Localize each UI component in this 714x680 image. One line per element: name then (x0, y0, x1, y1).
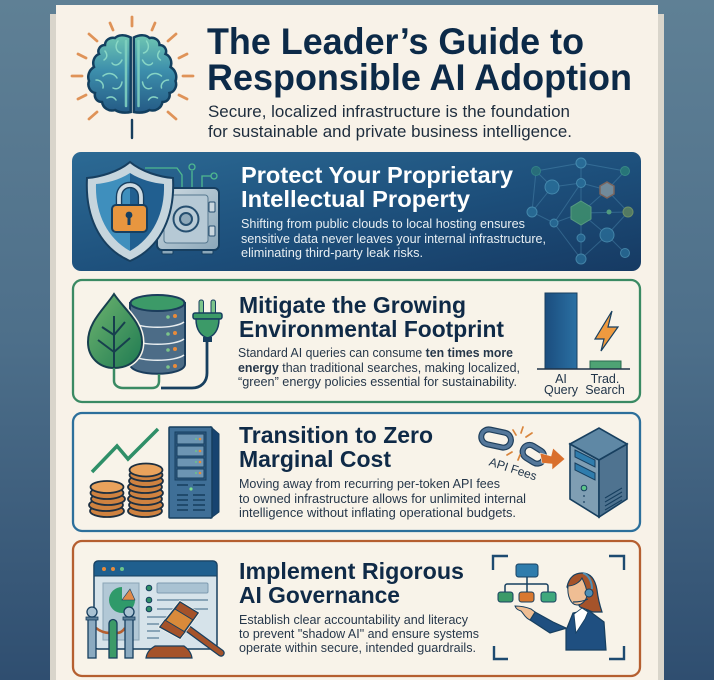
heading (241, 162, 513, 212)
body text: sensitive data never leaves your internal infrastructure, (241, 231, 546, 246)
icon: corner brackets (493, 556, 624, 659)
bar chart: AI query vs traditional search: Trad. (591, 372, 619, 386)
body text (239, 476, 526, 520)
body text (241, 216, 546, 260)
body text: Shifting from public clouds to local hosting ensures (241, 216, 525, 231)
heading: Intellectual Property (241, 186, 470, 212)
icon: broken chain with arrow (480, 427, 565, 470)
heading: AI Governance (239, 582, 400, 608)
icon: rising trend line (92, 429, 158, 472)
heading: Transition to Zero (239, 422, 433, 448)
body text: “green” energy policies essential for sustainability. (238, 374, 517, 389)
icon: person pointing (515, 573, 606, 650)
body text: intelligence without inflating operational budgets. (239, 505, 516, 520)
heading (239, 422, 433, 472)
icon: org chart (498, 564, 556, 602)
bar chart: AI query vs traditional search (537, 293, 630, 397)
panel: protect intellectual property (72, 152, 641, 271)
icon: gavel (146, 602, 221, 658)
heading: Implement Rigorous (239, 558, 464, 584)
body text: operate within secure, intended guardrails. (239, 640, 476, 655)
bar chart: AI query vs traditional search: AI (555, 372, 567, 386)
icon: network graph (527, 158, 633, 264)
panel: zero marginal cost (73, 413, 640, 531)
icon: server rack (169, 427, 219, 518)
subtitle: for sustainable and private business intelligence. (208, 123, 572, 141)
panel: environmental footprint (73, 280, 640, 402)
icon: coin stacks (89, 464, 163, 517)
body text: eliminating third-party leak risks. (241, 245, 423, 260)
heading: Marginal Cost (239, 446, 391, 472)
body text: Establish clear accountability and literacy (239, 612, 468, 627)
icon: circuit traces (145, 164, 217, 188)
heading: Environmental Footprint (239, 316, 504, 342)
title: Responsible AI Adoption (207, 57, 632, 98)
body text (239, 612, 479, 655)
body text: energy than traditional searches, making localized, (238, 360, 520, 375)
body text (238, 345, 520, 389)
icon: glowing brain (72, 17, 193, 138)
icon: shield with lock (87, 162, 173, 261)
heading: Protect Your Proprietary (241, 162, 513, 188)
panel: AI governance (73, 541, 640, 676)
icon: safe (157, 188, 219, 254)
heading (239, 292, 504, 342)
icon: dashboard window (94, 561, 217, 649)
title (207, 21, 632, 98)
label: API Fees: API Fees (487, 455, 539, 483)
icon: leaf (88, 294, 159, 388)
body text: Standard AI queries can consume ten times more (238, 345, 513, 360)
title: The Leader’s Guide to (207, 21, 584, 62)
body text: to owned infrastructure allows for unlimited internal (239, 491, 526, 506)
subtitle (208, 103, 572, 141)
bar chart: AI query vs traditional search: Query (544, 383, 579, 397)
icon: power plug (161, 300, 222, 388)
icon: tower server (570, 428, 627, 517)
heading (239, 558, 464, 608)
subtitle: Secure, localized infrastructure is the foundation (208, 103, 570, 121)
body text: to prevent "shadow AI" and ensure systems (239, 626, 479, 641)
bar chart: AI query vs traditional search: Search (585, 383, 625, 397)
icon: stanchions (86, 607, 135, 658)
body text: Moving away from recurring per-token API fees (239, 476, 500, 491)
heading: Mitigate the Growing (239, 292, 466, 318)
icon: database (130, 295, 185, 374)
